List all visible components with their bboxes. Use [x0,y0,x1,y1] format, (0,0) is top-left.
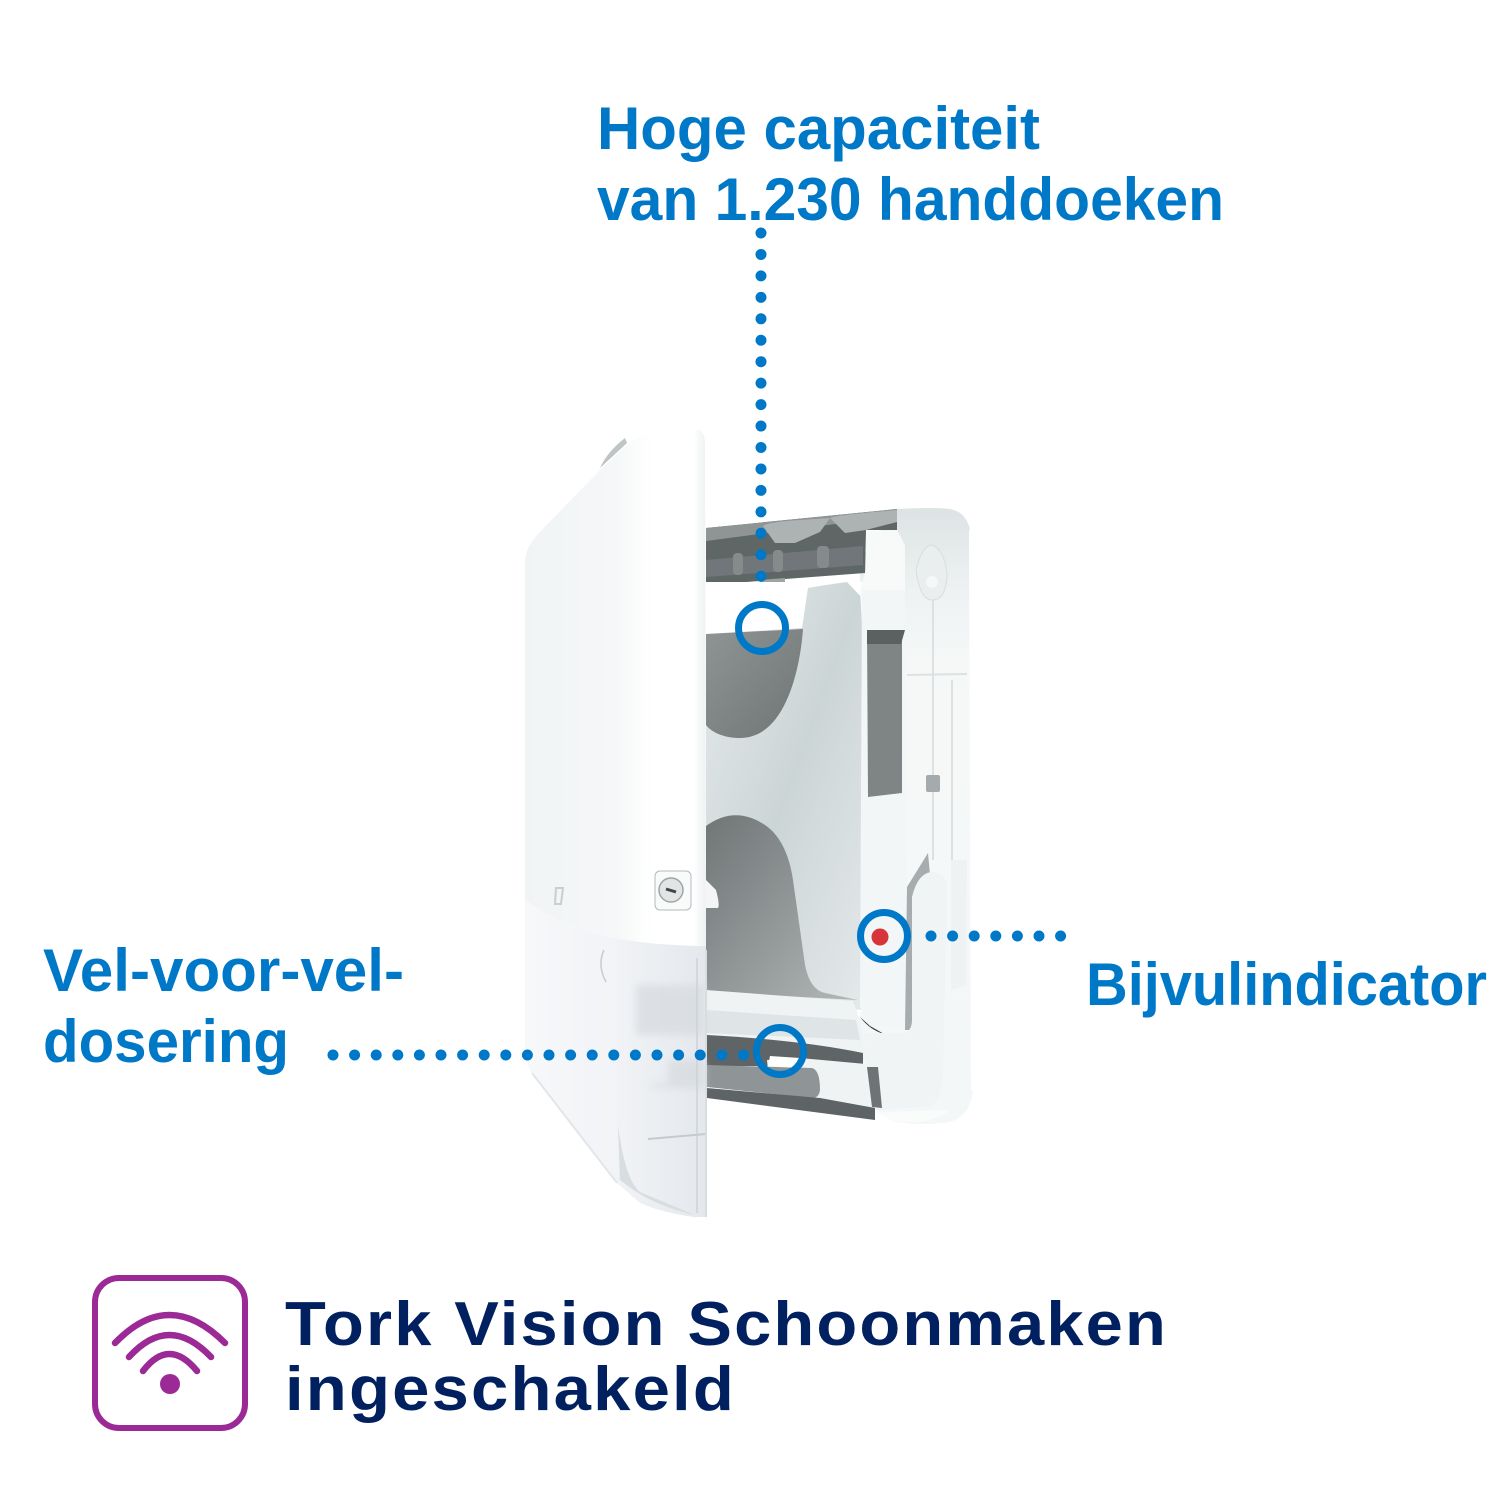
heading: capacity [597,95,1224,233]
heading: capacity: Hoge capaciteit [597,95,1040,162]
hinge [916,545,947,600]
dotted line: sheet dosing [333,1050,744,1060]
indicator bracket [905,853,930,1030]
back housing [860,508,973,1124]
roller wheel [867,1067,882,1108]
lower paper cutout [706,815,858,1000]
dotted line: refill indicator [931,930,1062,942]
marker ring: sheet dosing [756,1028,804,1074]
icon: wifi badge [95,1278,245,1428]
heading: refill indicator: Bijvulindicator [1086,951,1487,1018]
marker ring: capacity [738,604,786,652]
dotted line: capacity [756,233,766,580]
door lock [655,871,691,910]
heading: sheet dosing: dosering [43,1008,289,1075]
door upper [525,430,706,946]
heading: capacity: van 1.230 handdoeken [597,166,1224,233]
door translucent lower [525,900,706,1217]
marker ring: refill indicator [860,912,908,960]
centre white column [860,530,905,625]
red refill light [872,928,888,946]
heading: sheet dosing: Vel-voor-vel- [43,937,404,1004]
upper paper cutout [706,629,803,738]
heading: Tork Vision: Tork Vision Schoonmaken [285,1290,1168,1359]
heading: Tork Vision: ingeschakeld [285,1355,736,1424]
bottom roller area [706,990,866,1060]
heading: sheet dosing [43,937,404,1075]
product: open towel dispenser [525,430,973,1217]
door logo [555,888,563,904]
heading: Tork Vision [285,1290,1168,1424]
top dark bar [706,509,897,585]
white space and guide panel [706,582,866,1012]
